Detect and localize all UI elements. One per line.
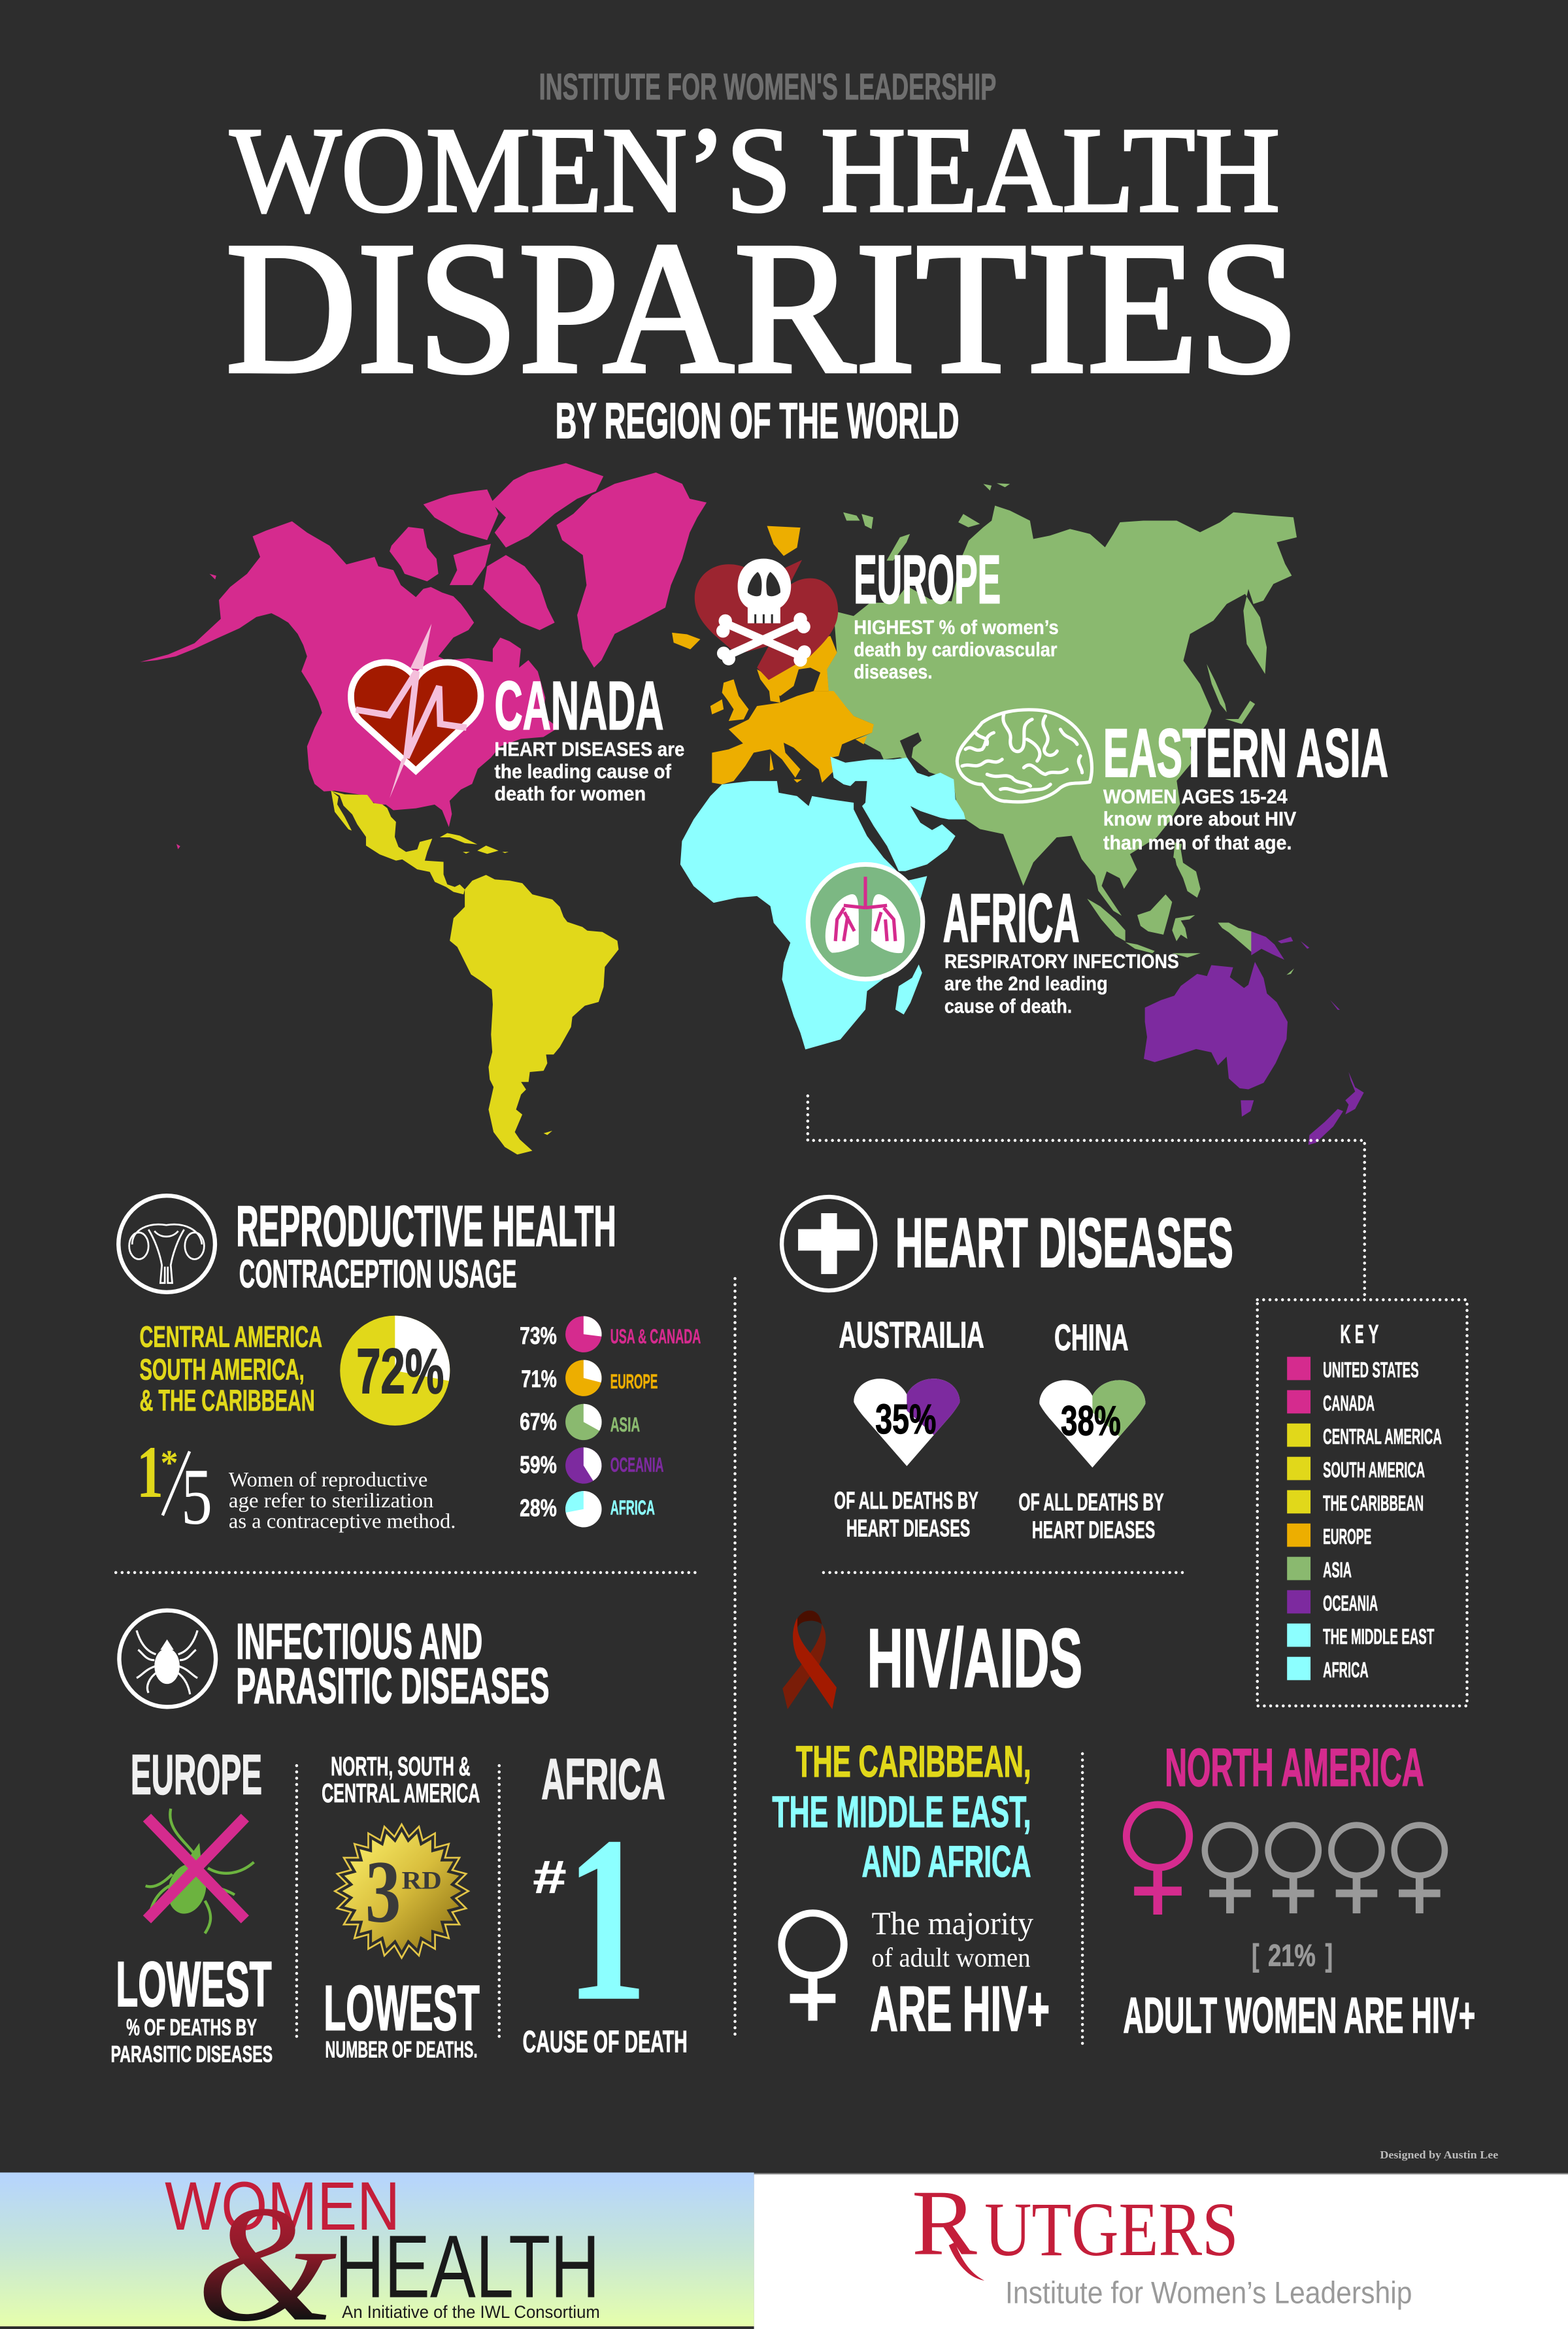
stat: one in five xyxy=(137,1431,212,1541)
icon: uterus in circle xyxy=(118,1196,215,1292)
heading: HIV/AIDS xyxy=(867,1612,1082,1705)
header: institute name: INSTITUTE FOR WOMEN'S LEADERSHIP xyxy=(539,67,996,108)
stat: 21 percent: 21% xyxy=(1268,1939,1316,1973)
subheading: CONTRACEPTION USAGE xyxy=(239,1252,517,1296)
callout: Canada text: death for women xyxy=(495,782,646,805)
column: Americas heading: NORTH, SOUTH & xyxy=(331,1751,471,1781)
pie chart row: Europe: 71% xyxy=(521,1365,557,1392)
column: Europe caption: % OF DEATHS BY xyxy=(126,2015,257,2040)
legend item: The Caribbean xyxy=(1287,1490,1424,1515)
icon: skull and crossbones on heart xyxy=(695,559,838,680)
callout: Eastern Asia text: than men of that age. xyxy=(1103,831,1292,854)
legend: key xyxy=(1258,1299,1467,1706)
icon: medical cross in circle xyxy=(782,1197,875,1290)
logo word: Women: WOMEN xyxy=(165,2168,400,2245)
callout: Europe text: diseases. xyxy=(854,661,933,683)
chart: China heart xyxy=(1039,1380,1145,1467)
column: Americas heading xyxy=(322,1751,480,1808)
heading: HEART DISEASES xyxy=(895,1203,1233,1282)
callout: Africa text: are the 2nd leading xyxy=(944,973,1108,995)
column: China: OF ALL DEATHS BY xyxy=(1018,1488,1164,1515)
heading: PARASITIC DISEASES xyxy=(236,1658,550,1715)
callout: Canada text: HEART DISEASES are xyxy=(495,738,684,760)
text: are HIV positive: ARE HIV+ xyxy=(870,1973,1050,2044)
map region: Europe xyxy=(672,526,874,784)
column: Africa number one: # xyxy=(533,1851,566,1902)
callout: Eastern Asia text xyxy=(1103,786,1297,854)
callout: Europe text: death by cardiovascular xyxy=(854,639,1058,661)
pie chart: 72% xyxy=(340,1316,450,1426)
chart: China heart: 38% xyxy=(1061,1398,1121,1445)
callout: Africa text: cause of death. xyxy=(944,995,1072,1017)
pie chart row: Africa: 28% xyxy=(520,1494,557,1521)
column: Europe caption xyxy=(110,2015,273,2068)
logo panel: Rutgers xyxy=(754,2171,1568,2329)
heading: INFECTIOUS AND xyxy=(236,1614,482,1670)
column: Americas caption: NUMBER OF DEATHS. xyxy=(325,2037,478,2062)
icon: female symbol white xyxy=(782,1913,844,2020)
logo tagline: An Initiative of the IWL Consortium xyxy=(342,2302,600,2322)
pie chart: 72%: 72% xyxy=(356,1335,444,1407)
regions list xyxy=(772,1737,1031,1886)
title line one: WOMEN’S HEALTH xyxy=(230,103,1280,238)
text: majority: The majority xyxy=(872,1905,1033,1941)
icon: heart with pulse on Canada xyxy=(351,624,481,798)
regions list: THE CARIBBEAN, xyxy=(796,1737,1031,1786)
pie chart row: Europe: EUROPE xyxy=(610,1369,658,1393)
regions label: CENTRAL AMERICA xyxy=(140,1320,322,1353)
column: Europe lowest: LOWEST xyxy=(116,1949,272,2020)
legend item: Asia: ASIA xyxy=(1323,1558,1352,1582)
pie chart row: Europe xyxy=(521,1360,658,1396)
callout: Canada text xyxy=(495,738,684,805)
column: Americas heading: CENTRAL AMERICA xyxy=(322,1778,480,1808)
logo word: Rutgers xyxy=(912,2171,1239,2281)
callout: Canada heading: CANADA xyxy=(495,667,663,744)
regions label: SOUTH AMERICA, xyxy=(140,1352,305,1386)
icon: brain xyxy=(957,710,1092,802)
map region: Asia xyxy=(827,483,1297,916)
panel: HIV/AIDS xyxy=(772,1611,1475,2045)
panel: infectious and parasitic diseases xyxy=(110,1611,688,2068)
legend item: Europe xyxy=(1287,1524,1371,1549)
map region: North America xyxy=(140,463,707,849)
column: China: CHINA xyxy=(1054,1318,1129,1359)
legend item: Central America xyxy=(1287,1424,1442,1449)
map region: Africa and Middle East xyxy=(680,757,965,1050)
column: Europe heading: EUROPE xyxy=(131,1743,262,1806)
pie chart row: USA and Canada xyxy=(520,1316,701,1352)
legend item: United States xyxy=(1287,1357,1419,1382)
legend item: Canada: CANADA xyxy=(1323,1391,1375,1415)
pie chart row: USA and Canada: USA & CANADA xyxy=(610,1324,701,1348)
callout: Eastern Asia text: WOMEN AGES 15-24 xyxy=(1103,786,1288,808)
legend item: The Middle East: THE MIDDLE EAST xyxy=(1323,1624,1434,1649)
callout: Europe text: HIGHEST % of women’s xyxy=(854,616,1059,639)
callout: Canada text: the leading cause of xyxy=(495,760,672,782)
legend item: South America: SOUTH AMERICA xyxy=(1323,1458,1425,1482)
credit: Designed by Austin Lee xyxy=(1380,2149,1499,2161)
icon: gold starburst badge: 3 xyxy=(365,1843,401,1941)
column: Australia: OF ALL DEATHS BY xyxy=(834,1486,978,1514)
column: Americas lowest: LOWEST xyxy=(324,1972,480,2043)
pie chart row: Asia: 67% xyxy=(520,1408,557,1435)
stat: 21 percent: ] xyxy=(1326,1939,1333,1973)
legend item: Central America: CENTRAL AMERICA xyxy=(1323,1424,1442,1449)
icon: female symbol magenta xyxy=(1126,1805,1190,1915)
callout: Africa text: RESPIRATORY INFECTIONS xyxy=(944,950,1179,973)
map region: Southeast Asian islands xyxy=(1087,850,1294,975)
pie chart row: Asia xyxy=(520,1404,640,1440)
legend item: Oceania: OCEANIA xyxy=(1323,1591,1378,1615)
column: Africa heading: AFRICA xyxy=(541,1747,665,1811)
column: Australia xyxy=(834,1315,984,1541)
column: Europe caption: PARASITIC DISEASES xyxy=(110,2042,273,2068)
legend title xyxy=(1341,1320,1378,1349)
text: sterilization note xyxy=(229,1468,456,1533)
logo tagline: Institute: Institute for Women’s Leadership xyxy=(1005,2275,1412,2310)
regions label: & THE CARIBBEAN xyxy=(140,1384,315,1417)
text: sterilization note: age refer to sterilization xyxy=(229,1489,433,1512)
legend item: Africa: AFRICA xyxy=(1323,1658,1369,1682)
legend item: Canada xyxy=(1287,1390,1375,1415)
pie chart row: USA and Canada: 73% xyxy=(520,1322,557,1349)
legend item: United States: UNITED STATES xyxy=(1323,1358,1419,1382)
callout: Africa text xyxy=(944,950,1179,1017)
text: sterilization note: as a contraceptive method. xyxy=(229,1510,456,1533)
legend item: Oceania xyxy=(1287,1590,1378,1615)
column: China: HEART DIEASES xyxy=(1032,1516,1155,1543)
pie chart row: Oceania: OCEANIA xyxy=(610,1452,663,1476)
text: majority: of adult women xyxy=(872,1943,1031,1972)
chart: Australia heart: 35% xyxy=(875,1396,936,1443)
legend title: K xyxy=(1341,1320,1351,1349)
icon: lungs in circle xyxy=(808,864,923,979)
pie chart row: Asia: ASIA xyxy=(610,1413,640,1436)
map region: Central and South America xyxy=(330,791,618,1154)
world map xyxy=(140,463,1364,1154)
pie chart row: Africa: AFRICA xyxy=(610,1496,655,1519)
callout: Europe text xyxy=(854,616,1059,683)
pie chart row: Africa xyxy=(520,1491,655,1527)
legend item: Asia xyxy=(1287,1557,1352,1582)
icon: tick in circle xyxy=(119,1611,216,1707)
icons: four gray female symbols xyxy=(1205,1825,1444,1913)
icon: awareness ribbon xyxy=(782,1611,837,1709)
logo word: Rutgers: UTGERS xyxy=(984,2187,1239,2272)
legend item: The Caribbean: THE CARIBBEAN xyxy=(1323,1491,1424,1515)
subtitle: BY REGION OF THE WORLD xyxy=(556,393,959,449)
logo word: Health: HEALTH xyxy=(335,2217,600,2316)
column: Africa number one xyxy=(533,1787,647,2051)
regions label xyxy=(140,1320,322,1417)
legend item: Europe: EUROPE xyxy=(1323,1524,1371,1549)
panel: reproductive health xyxy=(118,1194,701,1541)
title line two: DISPARITIES xyxy=(225,204,1299,412)
pie chart row: Oceania: 59% xyxy=(520,1451,557,1479)
logo word: Rutgers: R xyxy=(912,2171,977,2275)
callout: Africa heading: AFRICA xyxy=(943,880,1080,956)
heading: REPRODUCTIVE HEALTH xyxy=(236,1194,616,1258)
icon: gold starburst badge: RD xyxy=(402,1868,442,1895)
text: majority xyxy=(872,1905,1033,1972)
legend item: South America xyxy=(1287,1457,1425,1482)
legend title: E xyxy=(1355,1320,1364,1349)
icon: gold starburst badge xyxy=(335,1824,469,1958)
stat: one in five: * xyxy=(160,1443,178,1483)
map region: Oceania xyxy=(1144,931,1364,1145)
legend item: The Middle East xyxy=(1287,1624,1434,1649)
stat: 21 percent: [ xyxy=(1252,1939,1259,1973)
regions list: AND AFRICA xyxy=(862,1837,1031,1886)
stat: one in five: 1 xyxy=(137,1431,163,1513)
column: Africa caption: CAUSE OF DEATH xyxy=(523,2025,688,2060)
stat: one in five: 5 xyxy=(181,1452,212,1541)
column: China xyxy=(1018,1318,1164,1543)
logo panel: Women and Health xyxy=(0,2168,754,2329)
text: sterilization note: Women of reproductive xyxy=(229,1468,427,1491)
regions list: THE MIDDLE EAST, xyxy=(772,1787,1031,1837)
pie chart row: Oceania xyxy=(520,1447,663,1484)
column: Africa number one: 1 xyxy=(566,1787,647,2051)
callout: Eastern Asia text: know more about HIV xyxy=(1103,808,1297,830)
callout: Europe heading: EUROPE xyxy=(854,541,1001,618)
column: Australia: HEART DIEASES xyxy=(846,1514,970,1541)
legend item: Africa xyxy=(1287,1657,1369,1682)
legend title: Y xyxy=(1368,1320,1378,1349)
panel: heart diseases xyxy=(782,1197,1233,1543)
heading xyxy=(236,1614,550,1715)
icon: crossed out tick xyxy=(146,1809,254,1934)
chart: Australia heart xyxy=(854,1379,959,1466)
column: Australia: AUSTRAILIA xyxy=(839,1315,984,1356)
